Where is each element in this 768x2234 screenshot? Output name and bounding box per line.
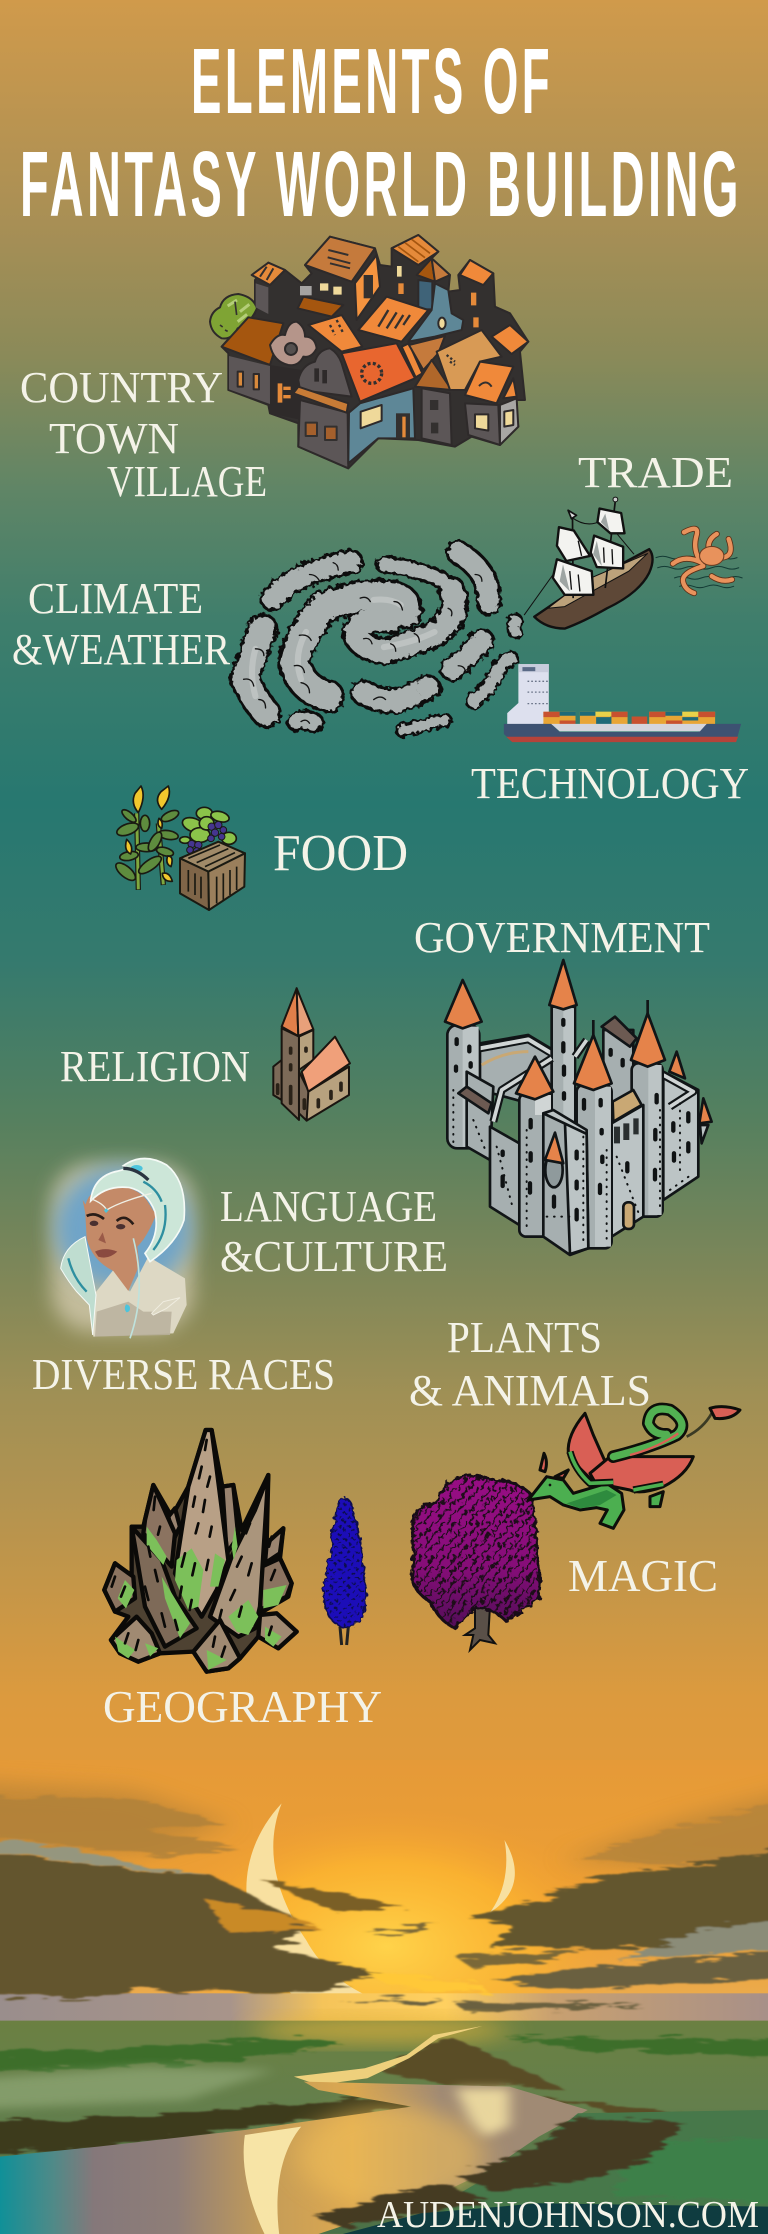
label: climate: CLIMATE (28, 574, 203, 623)
left shore (0, 2097, 411, 2155)
icon: sailing ship (524, 497, 653, 629)
icon: mountains (104, 1430, 297, 1672)
icon: castle (445, 960, 712, 1255)
field highlights (255, 2017, 509, 2043)
label: magic: MAGIC (568, 1550, 718, 1601)
storm clouds right (338, 1797, 768, 2012)
label: and culture: &CULTURE (220, 1232, 448, 1281)
icon: spiral weather clouds (244, 553, 516, 731)
label: technology: TECHNOLOGY (471, 759, 749, 808)
icon: village (210, 235, 528, 468)
storm clouds left (0, 1797, 578, 1998)
icon: container ship (504, 664, 741, 742)
bright cloud light (362, 1970, 490, 1993)
label: religion: RELIGION (60, 1042, 250, 1091)
sky (0, 1760, 768, 2023)
icon: purple willow tree (412, 1475, 540, 1650)
horizon band (0, 1993, 768, 2022)
label: food: FOOD (273, 825, 408, 882)
label: plants: PLANTS (447, 1313, 602, 1362)
icon: church (273, 988, 350, 1121)
icon: kraken (656, 529, 742, 593)
river (294, 2026, 482, 2085)
moon reflection (244, 2127, 301, 2234)
water golden glow (299, 2107, 485, 2207)
rocky right shore (372, 2037, 696, 2137)
ground (0, 2021, 768, 2234)
label: and weather: &WEATHER (12, 625, 231, 674)
label: and animals: & ANIMALS (409, 1366, 651, 1415)
portrait: elf character (52, 1158, 193, 1338)
water (0, 2082, 588, 2234)
title (20, 29, 742, 236)
label: government: GOVERNMENT (414, 913, 710, 962)
label: geography: GEOGRAPHY (103, 1681, 382, 1732)
label: language: LANGUAGE (220, 1182, 437, 1231)
label: town: TOWN (49, 414, 179, 463)
dark water lower right (343, 2203, 768, 2234)
icon: corn, grapes and crate (113, 786, 245, 910)
label: trade: TRADE (578, 448, 733, 497)
glow (152, 1807, 622, 2087)
upper haze (0, 1780, 768, 1880)
icon: green dragon (528, 1407, 740, 1528)
crescent moon (246, 1803, 515, 2024)
icon: blue cypress tree (324, 1498, 366, 1645)
label: diverse races: DIVERSE RACES (32, 1350, 335, 1399)
label: village: VILLAGE (107, 457, 267, 506)
label: country: COUNTRY (20, 363, 223, 412)
sunset landscape with crescent moon (0, 1760, 768, 2234)
